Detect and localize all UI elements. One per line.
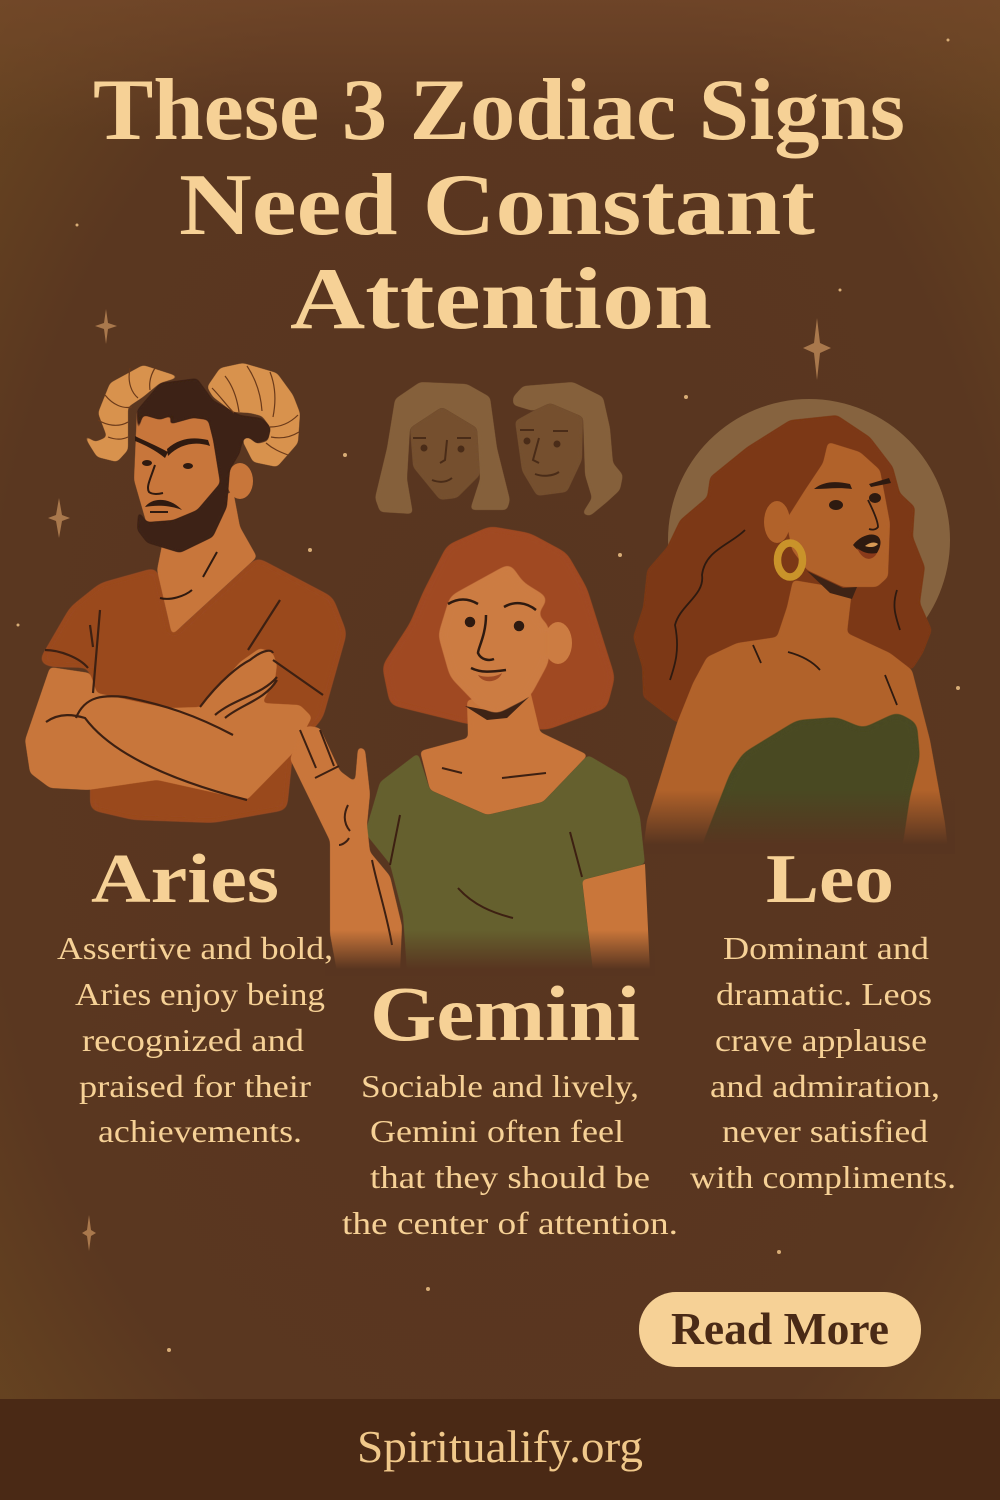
left horn — [82, 365, 180, 462]
footer: Spiritualify.org — [357, 1421, 643, 1472]
title: Need Constant — [179, 157, 815, 254]
neck — [157, 490, 257, 635]
Gemini description: that they should be — [370, 1159, 650, 1195]
lip and nose details — [670, 500, 900, 705]
neck shadow — [465, 697, 529, 720]
Gemini name: Gemini — [370, 970, 640, 1057]
left twin — [375, 382, 510, 514]
Aries description: recognized and — [82, 1022, 304, 1058]
face — [786, 442, 890, 587]
facial features — [448, 600, 536, 672]
Leo description: with compliments. — [690, 1159, 956, 1195]
head — [134, 400, 232, 540]
shirt — [365, 753, 645, 972]
Gemini description: Sociable and lively, — [361, 1068, 639, 1104]
ear — [227, 463, 253, 499]
ear — [544, 622, 572, 664]
lips — [478, 673, 502, 681]
fade under Leo — [635, 790, 955, 854]
arm, hand and shirt lines — [45, 600, 323, 800]
raised arm — [290, 726, 402, 972]
neck and body — [643, 580, 948, 850]
button: Read More — [639, 1292, 921, 1367]
Leo name: Leo — [766, 841, 894, 918]
footer — [0, 1399, 1000, 1500]
face lines — [148, 465, 217, 599]
title — [93, 62, 905, 348]
panel: Leo — [690, 841, 956, 1195]
Aries description — [57, 930, 333, 1149]
button: Read More: Read More — [671, 1303, 889, 1354]
Gemini description — [342, 1068, 678, 1241]
figure: Leo — [633, 399, 950, 850]
shirt — [38, 557, 347, 823]
right arm — [582, 864, 650, 972]
hair and beard — [137, 378, 272, 553]
right horn — [207, 363, 300, 467]
figure: Gemini — [290, 526, 650, 972]
Leo description: dramatic. Leos — [716, 976, 932, 1012]
right twin — [513, 382, 623, 516]
figure: Aries — [25, 363, 347, 823]
hair — [633, 415, 932, 723]
face — [438, 563, 549, 714]
facial features — [814, 478, 891, 554]
Aries description: Aries enjoy being — [75, 976, 325, 1012]
figure: twin faces — [375, 382, 623, 516]
panel: Gemini — [342, 970, 678, 1241]
neck shadow — [807, 571, 857, 599]
brows and mouth — [135, 436, 210, 510]
Gemini description: Gemini often feel — [370, 1113, 624, 1149]
horn ridges — [98, 366, 299, 455]
Leo description: never satisfied — [722, 1113, 928, 1149]
earring — [778, 543, 802, 577]
panel: Aries — [57, 841, 333, 1149]
title: Attention — [290, 251, 712, 348]
title: These 3 Zodiac Signs — [93, 62, 905, 159]
fade under Gemini — [325, 930, 655, 976]
Aries description: achievements. — [98, 1113, 302, 1149]
Aries name: Aries — [91, 841, 279, 918]
neck and chest — [420, 690, 588, 815]
ear — [764, 501, 790, 543]
hair — [382, 526, 615, 730]
Gemini description: the center of attention. — [342, 1205, 678, 1241]
halo — [668, 399, 950, 681]
dress — [700, 712, 920, 850]
forearms — [25, 648, 312, 800]
Leo description: and admiration, — [710, 1068, 940, 1104]
Aries description: Assertive and bold, — [57, 930, 333, 966]
Aries description: praised for their — [79, 1068, 311, 1104]
hand and shirt lines — [300, 730, 582, 945]
Leo description: Dominant and — [723, 930, 929, 966]
Leo description — [690, 930, 956, 1195]
Leo description: crave applause — [715, 1022, 927, 1058]
